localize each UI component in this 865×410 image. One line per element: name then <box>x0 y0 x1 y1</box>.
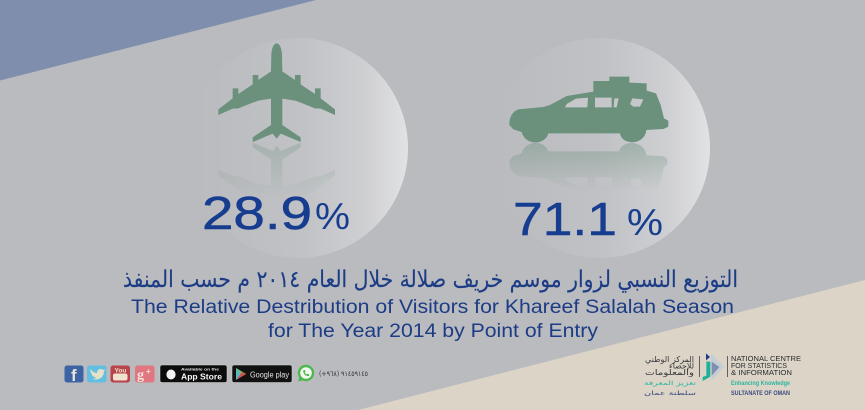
badge: Google Play <box>232 365 292 382</box>
panel: air entry <box>188 38 408 258</box>
social and app links <box>64 365 368 385</box>
value: 28.9%: 28.9 <box>202 187 312 239</box>
badge: App Store <box>160 365 227 382</box>
logo English country: SULTANATE OF OMAN <box>731 391 790 397</box>
heading: English title: for The Year 2014 by Point of Entry <box>268 321 599 342</box>
logo Arabic slogan: تعزيز المعرفة <box>644 380 696 387</box>
logo Arabic name: المركز الوطني <box>645 355 694 364</box>
badge: App Store: App Store <box>181 372 222 382</box>
disc: land <box>490 38 710 258</box>
disc: air <box>188 38 408 258</box>
logo English name: & INFORMATION <box>731 368 792 377</box>
heading: Arabic title: التوزيع النسبي لزوار موسم خريف صلالة خلال العام ٢٠١٤ م حسب المنفذ <box>123 267 738 293</box>
value: 28.9% <box>202 187 350 239</box>
value: 71.1% <box>513 193 663 245</box>
bottom-right beige corner <box>358 280 865 410</box>
icon: facebook: f <box>71 366 77 385</box>
icon: facebook <box>64 366 84 385</box>
logo mark <box>703 353 724 381</box>
icon: youtube: You <box>114 368 126 374</box>
reflection: car <box>509 143 667 194</box>
logo Arabic country: سلطنة عمان <box>644 390 696 397</box>
logo English name: FOR STATISTICS <box>731 361 787 370</box>
badge: App Store: Available on the <box>181 366 220 372</box>
badge: Google Play: Google play <box>250 370 289 380</box>
logo English slogan: Enhancing Knowledge <box>731 380 790 387</box>
heading: English title: The Relative Destribution of Visitors for Khareef Salalah Season <box>131 297 734 318</box>
value: 71.1%: 71.1 <box>513 193 617 245</box>
icon: google plus <box>135 366 154 383</box>
heading: English title <box>131 297 734 342</box>
logo English name: NATIONAL CENTRE <box>731 354 801 363</box>
logo English name <box>731 354 801 377</box>
icon: car with luggage <box>509 77 668 142</box>
value: 28.9%: % <box>315 196 350 237</box>
panel: land entry <box>490 38 710 258</box>
icon: airplane <box>218 43 335 142</box>
logo Arabic name: للإحصاء <box>669 362 694 372</box>
icon: google plus: g <box>137 368 144 383</box>
icon: whatsapp <box>298 365 314 382</box>
top-left blue corner <box>0 0 316 80</box>
logo Arabic name: والمعلومات <box>645 368 694 377</box>
reflection: airplane <box>218 143 335 200</box>
phone number: (+٩٦٨) ٩١٤٥٩١٤٥ <box>319 370 368 378</box>
icon: twitter <box>87 366 106 382</box>
logo: National Centre for Statistics and Information <box>644 353 801 397</box>
value: 71.1%: % <box>627 202 663 243</box>
icon: youtube <box>110 366 130 382</box>
logo Arabic name <box>645 355 694 377</box>
icon: google plus: + <box>146 367 151 376</box>
